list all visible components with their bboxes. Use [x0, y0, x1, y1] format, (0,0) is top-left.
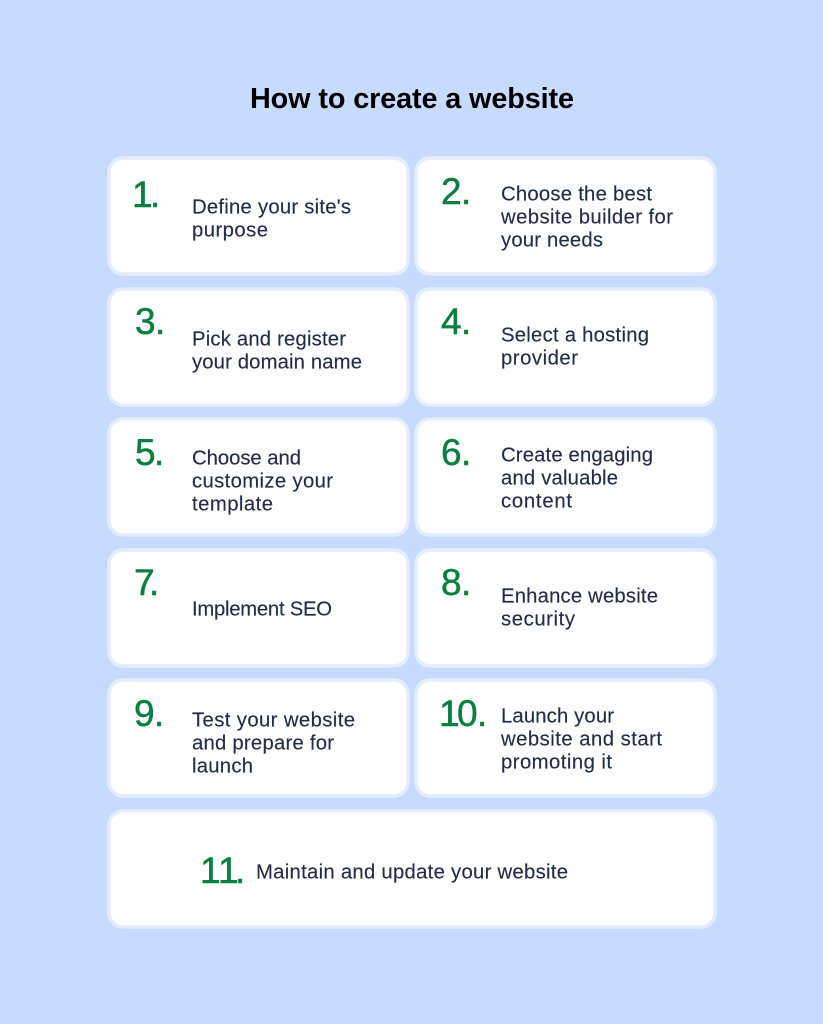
card 6: content [501, 491, 572, 513]
title: How to create a website [250, 83, 574, 115]
card 5: customize your [192, 471, 333, 493]
card 4: 4. [441, 301, 471, 342]
card 8: 8. [441, 562, 471, 603]
card 8 [416, 550, 715, 666]
card 2: 2. [441, 171, 471, 212]
card 4: provider [501, 348, 578, 370]
card 6: 6. [441, 432, 471, 473]
card 9: 9. [134, 693, 164, 734]
card 11 [109, 811, 715, 927]
card 9: launch [192, 756, 253, 778]
card 5: 5. [135, 432, 164, 473]
card 5: Choose and [192, 448, 301, 470]
card 6: Create engaging [501, 445, 653, 467]
card 5 [109, 419, 408, 535]
card 2: your needs [501, 230, 603, 252]
card 8: security [501, 609, 576, 631]
card 10: 10. [439, 693, 487, 734]
card 1: Define your site's [192, 197, 351, 219]
card 5: template [192, 494, 273, 516]
card 2 [416, 158, 715, 274]
card 1 [109, 158, 408, 274]
card 3: 3. [135, 301, 165, 342]
card 4 [416, 289, 715, 405]
card 10: promoting it [501, 752, 612, 774]
card 11: 11. [200, 850, 245, 891]
card 7: 7. [134, 562, 159, 603]
card 7 [109, 550, 408, 666]
card 9: and prepare for [192, 733, 334, 755]
card 3: Pick and register [192, 329, 346, 351]
card 11: Maintain and update your website [256, 862, 568, 884]
card 2: Choose the best [501, 184, 652, 206]
card 3: your domain name [192, 352, 362, 374]
card 8: Enhance website [501, 586, 658, 608]
card 9 [109, 680, 408, 796]
card 1: purpose [192, 220, 268, 242]
card 1: 1. [132, 174, 160, 215]
card 9: Test your website [192, 710, 355, 732]
card 6 [416, 419, 715, 535]
card 10: website and start [500, 729, 662, 751]
card 10 [416, 680, 715, 796]
card 3 [109, 289, 408, 405]
card 6: and valuable [501, 468, 618, 490]
card 10: Launch your [501, 706, 614, 728]
card 7: Implement SEO [192, 599, 332, 621]
card 2: website builder for [500, 207, 673, 229]
card 4: Select a hosting [501, 325, 649, 347]
